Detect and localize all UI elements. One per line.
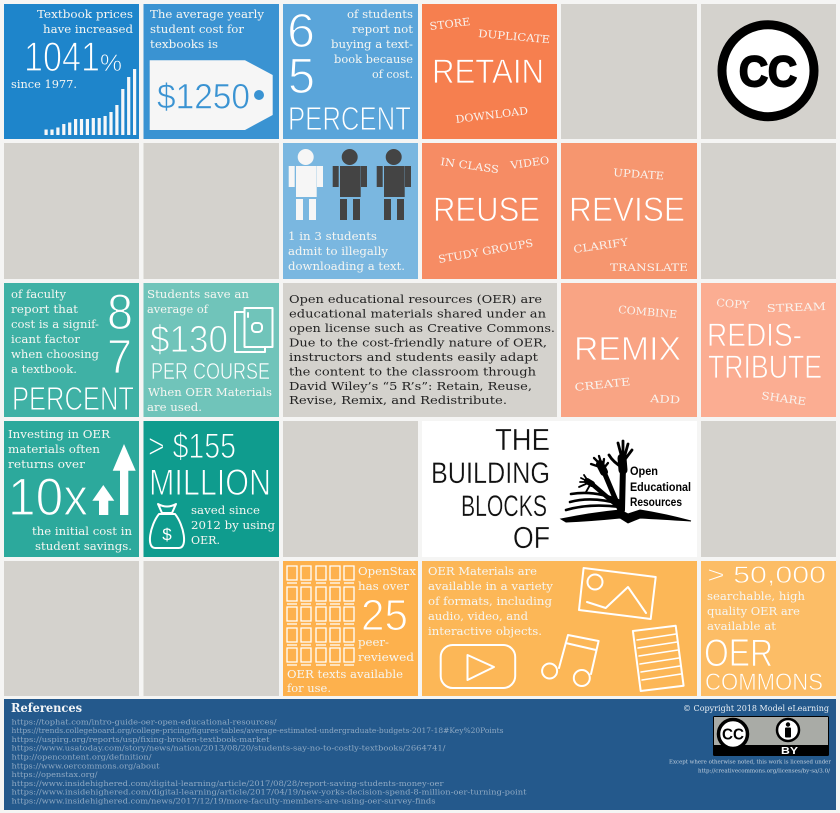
text: of students report: book because [334, 52, 413, 66]
text: investing in oer [8, 427, 110, 471]
title: the building blocks of [431, 422, 550, 555]
text: license note: http://creativecommons.org/licenses/by-sa/3.0/ [698, 768, 830, 774]
text: openstax has over: OpenStax [358, 564, 417, 578]
text: textbook prices have increased: Textbook prices [37, 7, 133, 21]
panel: 10x returns [4, 421, 139, 557]
panel: redistribute [701, 283, 836, 417]
text: of faculty report: of faculty [11, 287, 67, 301]
text block: reference links: https://openstax.org/ [12, 770, 98, 779]
stat: 10x: 10x [8, 468, 88, 527]
text: formats: audio, video, and [428, 609, 529, 623]
tag: study groups: STUDY GROUPS [437, 237, 534, 266]
text: formats: available in a variety [428, 579, 554, 593]
title: the building blocks of: BUILDING [431, 457, 550, 490]
heading: redistribute [707, 317, 822, 385]
text: average yearly cost [150, 7, 264, 51]
tag: update: UPDATE [613, 167, 665, 183]
panel: 1 in 3 students [283, 143, 418, 279]
stat: 1041%: 1041 [24, 33, 100, 80]
heading: oer commons [704, 632, 823, 696]
text: of students report [331, 7, 413, 81]
stat: > 50,000: > 50,000 [707, 562, 826, 589]
icon: image [579, 568, 656, 619]
text: initial cost: student savings. [35, 539, 132, 553]
text block: definition: Revise, Remix, and Redistribute. [289, 393, 507, 407]
icon: banknotes [235, 308, 272, 352]
panel: creative commons logo [701, 4, 836, 139]
panel: oer definition [283, 283, 557, 417]
icon: white student [289, 149, 323, 220]
text block: reference links: https://www.oercommons.org/about [12, 761, 160, 770]
text: searchable: available at [707, 619, 776, 633]
icon: money bag: $ [162, 525, 172, 544]
panel: formats [422, 561, 697, 696]
text: searchable: quality OER are [707, 604, 800, 618]
tag: combine: COMBINE [618, 304, 678, 321]
text: 1 in 3 students: downloading a text. [288, 259, 405, 273]
panel: empty block [283, 421, 418, 557]
icon: price tag: $1250 [157, 78, 250, 116]
text: searchable: searchable, high [707, 589, 806, 603]
badge: cc by license: BY [781, 745, 798, 757]
stat: 87: 8 [107, 284, 133, 340]
icon: large arrow [113, 444, 136, 515]
text block: reference links: https://www.usatoday.com/story/news/nation/2013/08/20/students-say-no-to-costly-textbooks/2664741/ [12, 744, 446, 753]
heading: references: References [11, 701, 82, 715]
stat: 1041%: % [100, 50, 122, 77]
text: peer-reviewed: for use. [287, 681, 331, 695]
panel: empty block [144, 143, 279, 279]
panel: empty block [4, 561, 139, 696]
title: the building blocks of: THE [495, 422, 550, 457]
text: license note: Except where otherwise noted, this work is licensed under [669, 760, 831, 766]
label: percent: PERCENT [12, 380, 134, 417]
text: average yearly cost: texbooks is [150, 37, 218, 51]
panel: openstax [283, 561, 418, 696]
text: logo wordmark: Educational [630, 482, 691, 494]
stat: 87: 7 [107, 331, 132, 384]
tag: download: DOWNLOAD [455, 105, 529, 126]
text: of students report: buying a text- [331, 37, 413, 51]
icon: book with raised hands [561, 441, 691, 523]
icon: document [633, 626, 684, 691]
text: of faculty report: report that [11, 302, 78, 316]
panel: 65 percent [283, 4, 418, 139]
text: investing in oer: returns over [8, 457, 86, 471]
text: when oer materials are used: When OER Materials [148, 385, 272, 399]
text: logo wordmark [630, 466, 691, 509]
text block: reference links [12, 717, 526, 806]
text: average yearly cost: The average yearly [150, 7, 264, 21]
text block: definition: open license such as Creative Commons. [289, 321, 555, 335]
icon: dark student [333, 149, 367, 220]
panel: empty block [701, 421, 836, 557]
label: percent: PERCENT [288, 100, 411, 137]
text: of students report: of cost. [372, 67, 413, 81]
text: of students report: report not [352, 22, 413, 36]
text: of faculty report: icant factor [11, 332, 81, 346]
text: saved since 2012: 2012 by using [191, 518, 276, 532]
text: when oer materials are used: are used. [147, 400, 202, 414]
stat: 87 [107, 284, 133, 384]
text: formats [428, 564, 554, 638]
text: license note [669, 760, 831, 774]
text block: definition: educational materials shared under an [289, 306, 547, 320]
text: students save: Students save an [147, 287, 250, 301]
text block: reference links: https://www.insidehighered.com/digital-learning/article/2017/04/19/new-yorks-decision-spend-8-million-oer-turning-point [12, 788, 526, 797]
tag: stream: STREAM [767, 301, 826, 315]
icon: video player [441, 645, 515, 688]
text: 1 in 3 students: admit to illegally [288, 244, 388, 258]
tag: in class: IN CLASS [440, 156, 500, 176]
label: per course: PER COURSE [151, 358, 270, 384]
stat: $130: $130 [150, 319, 228, 361]
text: peer-reviewed: reviewed [358, 650, 415, 664]
text block: reference links: http://opencontent.org/definition/ [12, 752, 152, 762]
panel: revise [561, 143, 697, 279]
stat: 65: 5 [288, 48, 315, 104]
panel: textbook prices [4, 4, 139, 139]
heading: reuse: REUSE [433, 191, 540, 229]
tag: copy: COPY [716, 297, 751, 312]
text: formats: of formats, including [428, 594, 553, 608]
text: students save [147, 287, 250, 316]
text: searchable [707, 589, 806, 633]
heading: remix: REMIX [574, 330, 681, 367]
icon: music notes [542, 635, 599, 686]
tag: create: CREATE [574, 376, 631, 394]
panel: title [422, 421, 697, 557]
text: since 1977: since 1977. [11, 77, 77, 91]
text: formats: interactive objects. [428, 624, 542, 638]
text: copyright: © Copyright 2018 Model eLearning [683, 704, 830, 714]
text: textbook prices have increased [37, 7, 134, 36]
heading: oer commons: OER [704, 632, 773, 675]
tag: clarify: CLARIFY [573, 236, 630, 256]
heading: revise: REVISE [569, 191, 685, 229]
heading: oer commons: COMMONS [705, 669, 823, 696]
text: of faculty report: cost is a signif- [11, 317, 99, 331]
badge: cc by license: CC [722, 726, 744, 744]
icon: dark student [377, 149, 411, 220]
text: students save: average of [147, 302, 209, 316]
text: 1 in 3 students: 1 in 3 students [288, 229, 377, 243]
heading: redistribute: REDIS- [707, 317, 802, 353]
text block: definition: David Wiley’s “5 R’s”: Retain, Reuse, [289, 379, 532, 393]
panel: empty block [144, 561, 279, 696]
text: saved since 2012: saved since [191, 503, 260, 517]
text: peer-reviewed [287, 635, 415, 695]
panel: average yearly cost [144, 4, 279, 139]
text block: reference links: https://trends.collegeboard.org/college-pricing/figures-tables/average-estimated-undergraduate-budgets-2017-18#Key%20Points [12, 726, 504, 735]
text: logo wordmark: Resources [630, 497, 682, 509]
text block: reference links: https://www.insidehighered.com/digital-learning/article/2017/08/28/report-saving-students-money-oer [12, 779, 444, 788]
stat: 25: 25 [361, 591, 408, 640]
tag: translate: TRANSLATE [610, 262, 688, 274]
text: peer-reviewed: peer- [358, 635, 389, 649]
text block: definition: instructors and students easily adapt [289, 350, 538, 364]
text: of faculty report: a textbook. [11, 362, 77, 376]
panel: empty block [701, 143, 836, 279]
panel: 87 percent [4, 283, 139, 417]
title: the building blocks of: BLOCKS [461, 490, 547, 523]
tag: share: SHARE [761, 390, 807, 408]
text: initial cost [32, 524, 133, 553]
text: of students report: of students [347, 7, 413, 21]
text: logo wordmark: Open [630, 466, 658, 478]
panel: oer commons [701, 561, 836, 696]
title: the building blocks of: OF [513, 520, 550, 555]
tag: duplicate: DUPLICATE [478, 28, 551, 46]
stat: 65 [287, 5, 315, 104]
text: openstax has over: has over [358, 579, 410, 593]
panel: 155 million saved [144, 421, 279, 557]
panel: references footer [4, 699, 836, 810]
text: 1 in 3 students [288, 229, 405, 273]
text block: definition [289, 292, 555, 407]
icon: cc: CC [739, 48, 797, 96]
text: saved since 2012 [191, 503, 276, 547]
text: peer-reviewed: OER texts available [287, 667, 403, 681]
text: when oer materials are used [147, 385, 272, 414]
icon: grid of textbooks [287, 566, 354, 665]
text block: definition: Due to the cost-friendly nature of OER, [289, 336, 547, 350]
tag: add: ADD [649, 393, 680, 407]
text: textbook prices have increased: have increased [43, 22, 134, 36]
text: openstax has over [358, 564, 417, 593]
text block: reference links: https://tophat.com/intro-guide-oer-open-educational-resources/ [12, 717, 277, 726]
tag: video: VIDEO [509, 155, 550, 172]
panel: reuse [422, 143, 557, 279]
text: of faculty report: when choosing [11, 347, 100, 361]
bar chart: price growth [44, 69, 136, 135]
panel: retain [422, 4, 557, 139]
badge: cc by license [713, 716, 829, 757]
text: average yearly cost: student cost for [150, 22, 245, 36]
text: of faculty report [11, 287, 100, 376]
stat: 65: 6 [287, 5, 315, 58]
text block: definition: the content to the classroom through [289, 364, 537, 378]
panel: remix [561, 283, 697, 417]
tag: store: STORE [429, 16, 471, 33]
panel: empty block [561, 4, 697, 139]
panel: empty block [4, 143, 139, 279]
heading: retain: RETAIN [432, 53, 544, 91]
stat: > $155 million [148, 427, 271, 503]
icon: small arrow [92, 485, 114, 515]
text: saved since 2012: OER. [191, 533, 220, 547]
text block: definition: Open educational resources (OER) are [289, 292, 542, 306]
stat: > $155 million: MILLION [149, 462, 271, 503]
text: investing in oer: Investing in OER [8, 427, 110, 441]
text: investing in oer: materials often [8, 442, 101, 456]
text block: reference links: https://uspirg.org/reports/usp/fixing-broken-textbook-market [12, 735, 270, 744]
text block: reference links: https://www.insidehighered.com/news/2017/12/19/more-faculty-members-are-using-oer-survey-finds [12, 796, 436, 806]
panel: student savings per course [144, 283, 279, 417]
stat: > $155 million: > $155 [148, 427, 236, 466]
text: formats: OER Materials are [428, 564, 537, 578]
logo: open educational resources [561, 441, 691, 523]
text: initial cost: the initial cost in [32, 524, 133, 538]
